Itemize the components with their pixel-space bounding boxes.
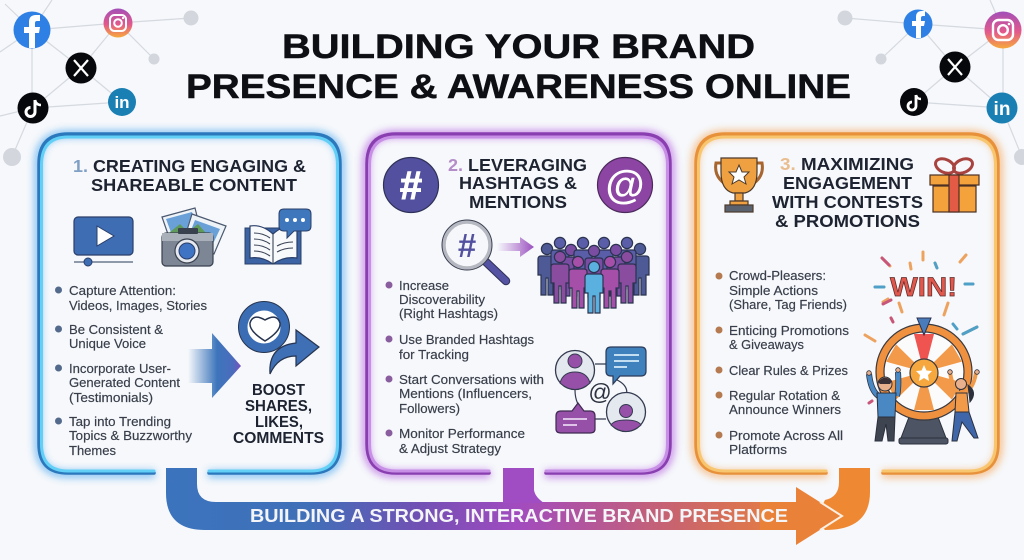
bullet list: Enticing Promotions	[729, 323, 850, 338]
bullet list: Followers)	[399, 401, 460, 416]
bullet list	[55, 283, 207, 458]
heading	[448, 155, 587, 212]
icon: crowd of people	[538, 237, 649, 313]
callout: boost shares likes comments	[233, 382, 324, 447]
illustration: prize wheel win	[865, 252, 979, 444]
icon: magnifier with hashtag	[442, 220, 506, 281]
band label: BUILDING A STRONG, INTERACTIVE BRAND PRESENCE	[250, 506, 788, 526]
icon: facebook	[14, 12, 50, 48]
icon: at sign circle	[598, 158, 652, 212]
bullet list: (Right Hashtags)	[399, 306, 498, 321]
icon: linkedin	[108, 88, 136, 116]
bullet list: Clear Rules & Prizes	[729, 363, 848, 378]
icon: x	[940, 52, 970, 82]
bullet list: Platforms	[729, 442, 788, 457]
title: PRESENCE & AWARENESS ONLINE	[186, 68, 851, 106]
bullet list: Mentions (Influencers,	[399, 386, 532, 401]
heading: ENGAGEMENT	[783, 173, 912, 193]
icon: gift box	[930, 156, 979, 212]
person right	[948, 370, 979, 441]
icon: conversation network	[556, 347, 646, 433]
panel: maximizing engagement with contests and promotions	[695, 134, 999, 474]
heading: 3. MAXIMIZING	[780, 154, 914, 174]
bullet list: Start Conversations with	[399, 372, 544, 387]
heading: 1. CREATING ENGAGING &	[73, 156, 306, 176]
callout: boost shares likes comments: COMMENTS	[233, 430, 324, 447]
flow arrow: building a strong brand presence	[166, 468, 870, 545]
icon: instagram	[104, 8, 132, 38]
icon: instagram	[984, 12, 1022, 48]
icon: trophy	[716, 158, 762, 212]
icon: at sign circle: @	[605, 163, 645, 207]
arrow: to boost	[188, 333, 241, 398]
bullet list: Generated Content	[69, 375, 180, 390]
bullet list: Topics & Buzzworthy	[69, 428, 193, 443]
wheel stand	[901, 417, 946, 438]
bullet list: (Share, Tag Friends)	[729, 297, 847, 312]
icon: hashtag circle: #	[400, 164, 422, 208]
icon: tiktok	[18, 92, 48, 124]
callout: boost shares likes comments: SHARES,	[245, 398, 312, 415]
bullet list: Increase	[399, 278, 449, 293]
panel: creating engaging and shareable content	[38, 134, 341, 474]
callout: boost shares likes comments: LIKES,	[255, 414, 303, 431]
icon: heart and share	[238, 302, 319, 374]
icon: x	[66, 52, 96, 84]
bullet list: Simple Actions	[729, 283, 819, 298]
person left	[867, 368, 900, 441]
confetti	[865, 252, 977, 403]
heading	[772, 154, 923, 231]
bullet list: Use Branded Hashtags	[399, 332, 534, 347]
icon: facebook	[904, 10, 932, 38]
icon: hashtag circle	[384, 158, 438, 212]
icon: tiktok	[900, 88, 928, 116]
icon: camera and photos	[162, 208, 226, 266]
title: BUILDING YOUR BRAND	[282, 28, 755, 66]
bullet list: & Adjust Strategy	[399, 441, 501, 456]
arrow: to audience	[497, 237, 534, 257]
bullet list: Promote Across All	[729, 428, 843, 443]
icon: linkedin	[986, 92, 1018, 124]
icon: magnifier with hashtag: #	[458, 227, 476, 264]
bullet list: Discoverability	[399, 292, 486, 307]
bullet list: Videos, Images, Stories	[69, 298, 207, 313]
bullet list: for Tracking	[399, 347, 469, 362]
panel: leveraging hashtags and mentions	[366, 134, 671, 474]
bullet list: Incorporate User-	[69, 361, 171, 376]
icon: linkedin: in	[994, 99, 1010, 120]
heading: & PROMOTIONS	[775, 211, 920, 231]
win label: WIN!	[890, 272, 957, 302]
social network right	[838, 0, 1024, 165]
heading	[73, 156, 306, 195]
wheel	[876, 324, 972, 420]
bullet list: Announce Winners	[729, 402, 842, 417]
bullet list: Regular Rotation &	[729, 388, 840, 403]
bullet list: Unique Voice	[69, 336, 146, 351]
heading: 2. LEVERAGING	[448, 155, 587, 175]
heading: MENTIONS	[469, 192, 567, 212]
bullet list: Tap into Trending	[69, 414, 171, 429]
bullet list	[386, 278, 544, 456]
icon: linkedin: in	[114, 93, 130, 112]
bullet list: Monitor Performance	[399, 426, 525, 441]
bullet list: Be Consistent &	[69, 322, 163, 337]
callout: boost shares likes comments: BOOST	[252, 382, 305, 399]
bullet list: Capture Attention:	[69, 283, 176, 298]
bullet list: Crowd-Pleasers:	[729, 268, 826, 283]
heading: SHAREABLE CONTENT	[91, 175, 297, 195]
icon: conversation network: @	[588, 379, 612, 405]
icon: video player	[74, 217, 133, 266]
bullet list: & Giveaways	[729, 337, 804, 352]
bullet list: (Testimonials)	[69, 390, 153, 405]
heading: HASHTAGS &	[459, 173, 577, 193]
title	[186, 28, 851, 106]
bullet list	[716, 268, 850, 457]
heading: WITH CONTESTS	[772, 192, 923, 212]
icon: open book with speech bubble	[245, 209, 311, 264]
social network left	[0, 0, 198, 166]
bullet list: Themes	[69, 443, 116, 458]
